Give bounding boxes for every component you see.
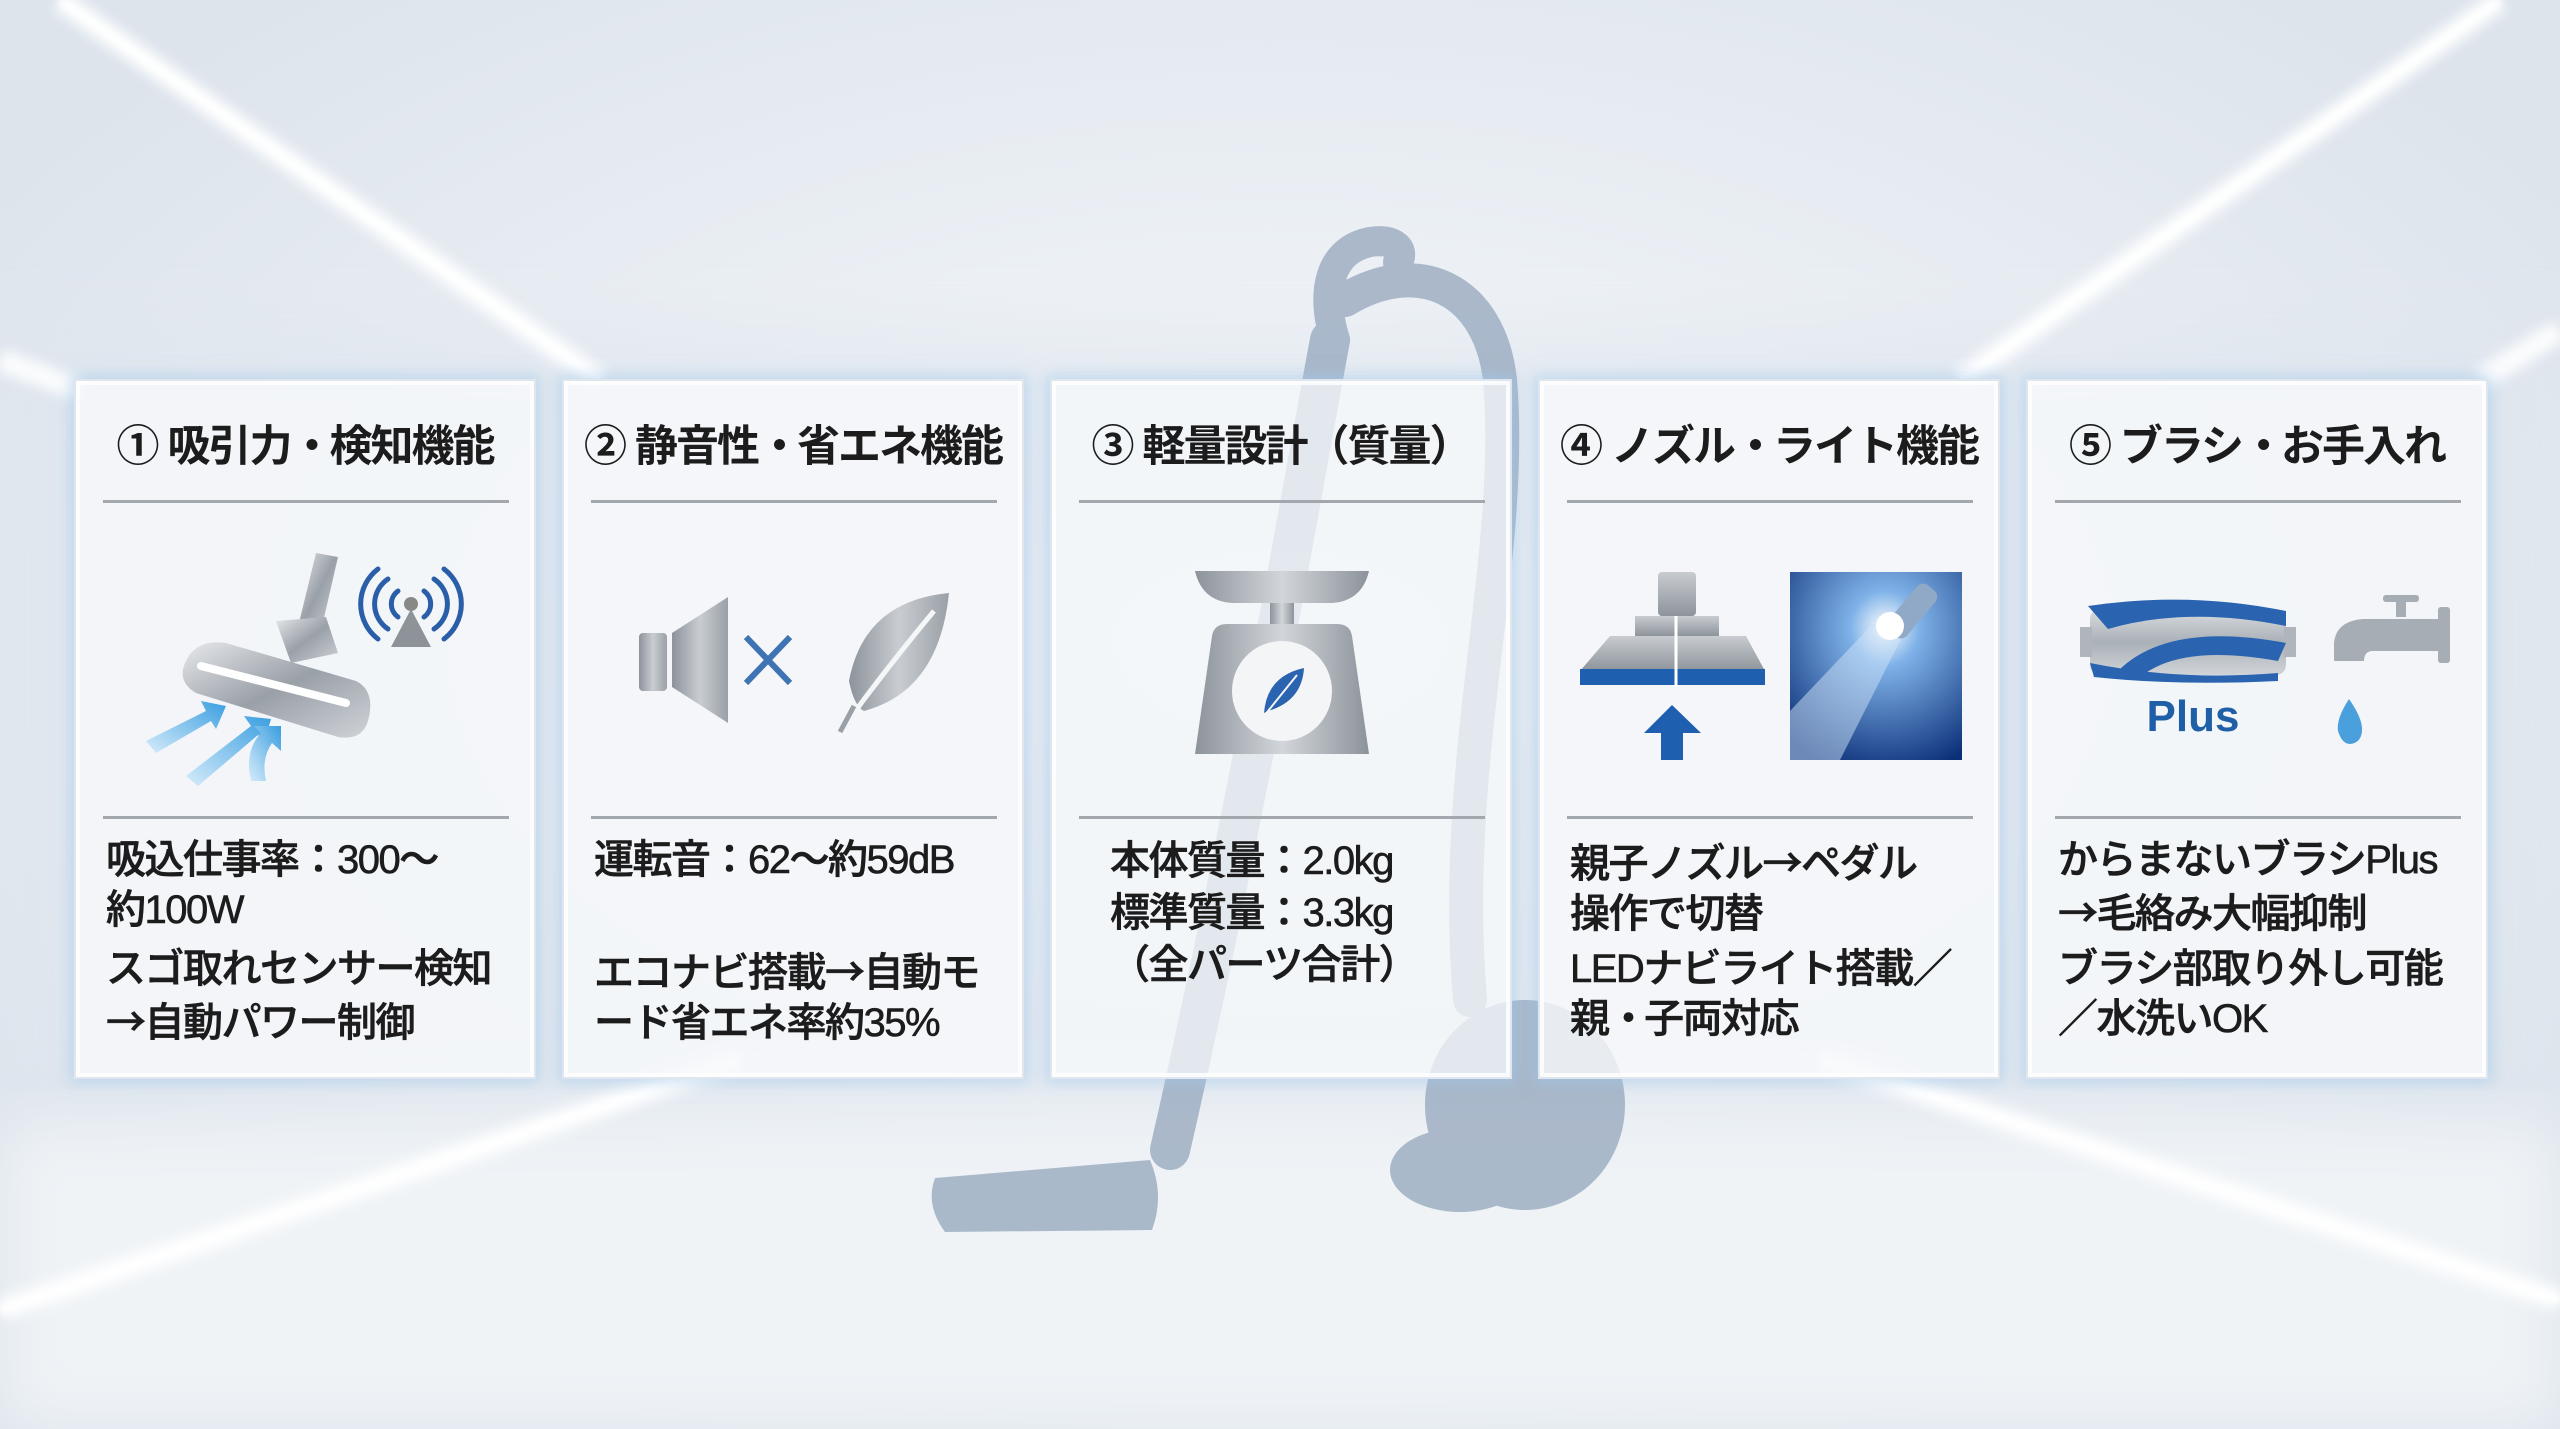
icon: nozzle with airflow and sensor [146, 553, 464, 786]
spec text 5 [2058, 838, 2438, 939]
panel 4: nozzle & light: LEDナビライト搭載／ [1570, 947, 1951, 991]
spec text 4: 親子ノズル→ペダル [1570, 831, 1916, 889]
icon: speaker x leaf [639, 593, 949, 733]
panel 1: suction & sensing: →自動パワー制御 [106, 990, 414, 1048]
title 4: ④ ノズル・ ライト機能 [1560, 423, 1978, 471]
spec text 3: 本体質量：2.0kg [1110, 839, 1393, 883]
spec text 2: 運転音：62～約59dB [594, 838, 954, 882]
title 2: ② 静音性・ 省エネ機能 [584, 423, 1002, 471]
icon: scale with feather [1195, 571, 1369, 754]
spec text 5: →毛絡み大幅抑制 [2058, 881, 2366, 939]
spec text 1: 吸込仕事率：300～ [106, 838, 438, 882]
panel 4: nozzle & light: 親・ 子両対応 [1570, 997, 1798, 1041]
spec text 1 [106, 838, 438, 932]
panel 5: brush & care: ／水洗いOK [2058, 997, 2267, 1041]
panel 1: suction & sensing [74, 379, 536, 1079]
panel 2: quiet & eco [562, 379, 1024, 1079]
spec text 4 [1570, 831, 1917, 936]
title 5: ⑤ ブラシ・ お手入れ [2069, 423, 2445, 471]
icon: parent-child nozzle and LED light [1580, 572, 1962, 760]
icon: brush plus and faucet [2080, 595, 2450, 744]
spec text 5: からまないブラシPlus [2058, 838, 2437, 882]
title 1: ① 吸引力・ 検知機能 [117, 423, 493, 471]
panel 3: lightweight [1050, 379, 1512, 1079]
panel 2: quiet & eco: エコナビ搭載→自動モ [594, 940, 979, 998]
panel 5: brush & care [2026, 379, 2488, 1079]
spec text 3: 標準質量：3.3kg [1110, 891, 1393, 935]
spec text 1: 約100W [106, 888, 243, 932]
spec text 3 [1110, 839, 1417, 987]
spec text 3: （全パーツ合計） [1110, 943, 1417, 987]
panel 2: quiet & eco: ード省エネ率約35% [594, 1001, 939, 1045]
icon: brush plus and faucet: Plus [2147, 692, 2239, 741]
title 3: ③ 軽量設計（質量） [1092, 423, 1470, 471]
panel 5: brush & care: ブラシ部取り外し可能 [2058, 947, 2442, 991]
panel 4: nozzle & light [1538, 379, 2000, 1079]
panel 1: suction & sensing: スゴ取れセンサー検知 [106, 947, 491, 991]
spec text 4: 操作で切替 [1570, 892, 1762, 936]
